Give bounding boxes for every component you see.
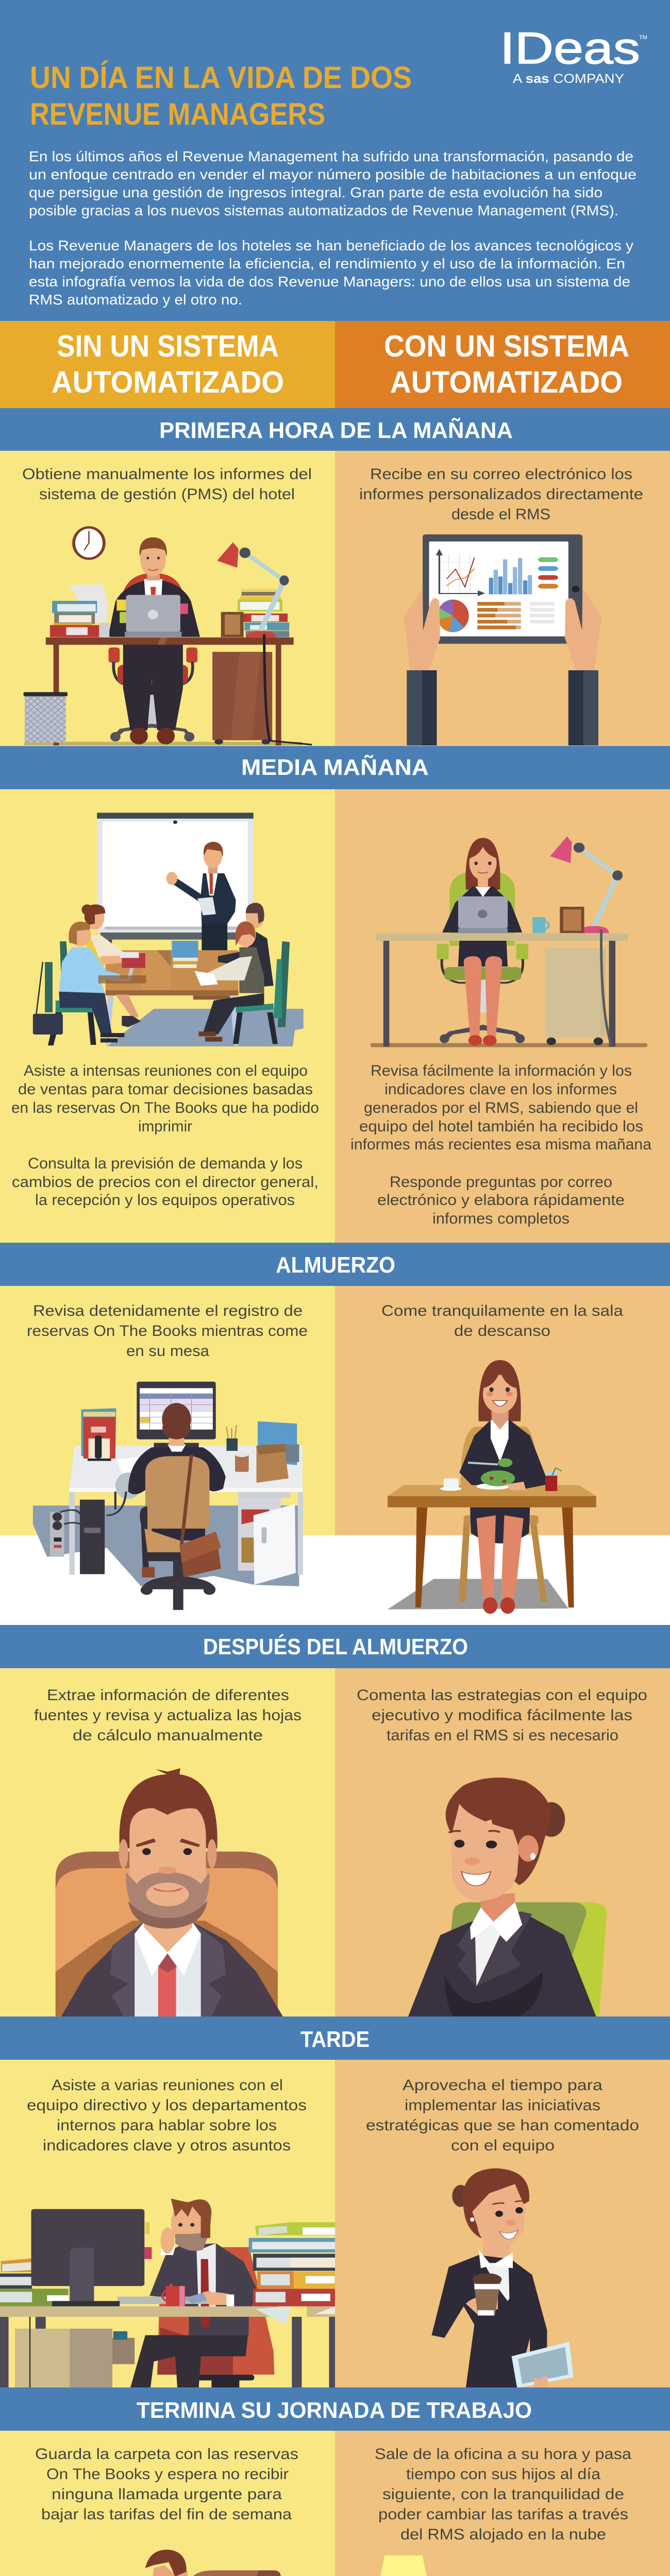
section heading: tarde: TARDE <box>300 2027 370 2052</box>
text: obtiene manualmente: sistema de gestión (PMS) del hotel <box>39 486 295 503</box>
text: revisa fácilmente: Revisa fácilmente la información y los <box>371 1062 632 1079</box>
illustration: woman at tidy desk with laptop <box>371 836 647 1047</box>
column heading: sin un sistema automatizado: AUTOMATIZADO <box>52 365 284 399</box>
intro paragraph 2: RMS automatizado y el otro no. <box>29 292 242 308</box>
illustration: exhausted man in armchair with children <box>44 2550 303 2576</box>
illustration: woman eating salad at table <box>388 1360 596 1614</box>
text: guarda la carpeta: On The Books y espera no recibir <box>46 2466 289 2483</box>
text: sale de la oficina: del RMS alojado en la nube <box>400 2526 606 2543</box>
text: revisa detenidamente: en su mesa <box>126 1343 209 1360</box>
section heading: tarde <box>0 2016 670 2060</box>
intro paragraph 1 <box>29 148 636 218</box>
panel: intro header <box>0 0 670 451</box>
column heading: con un sistema automatizado <box>335 321 670 408</box>
text: asiste a varias reuniones: internos para hablar sobre los <box>57 2117 277 2134</box>
text: guarda la carpeta: ninguna llamada urgente para <box>52 2486 282 2503</box>
text: revisa detenidamente: reservas On The Books mientras come <box>27 1323 308 1340</box>
text: sale de la oficina: tiempo con sus hijos al día <box>406 2466 600 2483</box>
section heading: después del almuerzo <box>0 1625 670 1668</box>
illustration: bearded man portrait <box>56 1768 283 2016</box>
text: asiste a intensas reuniones <box>11 1062 319 1135</box>
text: revisa fácilmente: indicadores clave en los informes <box>384 1081 617 1098</box>
text: revisa fácilmente: equipo del hotel también ha recibido los <box>359 1118 643 1135</box>
text: guarda la carpeta: Guarda la carpeta con las reservas <box>35 2446 298 2463</box>
title <box>30 60 412 131</box>
text: comenta las estrategias: ejecutivo y modifica fácilmente las <box>372 1707 632 1724</box>
text: aprovecha el tiempo: con el equipo <box>451 2137 555 2154</box>
text: responde preguntas: electrónico y elabora rápidamente <box>377 1192 625 1209</box>
intro paragraph 2: han mejorado enormemente la eficiencia, el rendimiento y el uso de la información. En <box>29 256 625 272</box>
text: guarda la carpeta: bajar las tarifas del fin de semana <box>41 2506 292 2523</box>
text: asiste a intensas reuniones: en las reservas On The Books que ha podido <box>11 1099 319 1116</box>
text: sale de la oficina: Sale de la oficina a su hora y pasa <box>375 2446 631 2463</box>
logo: IDeaS, a SAS company: IDeas <box>500 24 640 73</box>
section heading: almuerzo <box>0 1243 670 1286</box>
illustration: man from behind at desk eating <box>33 1382 303 1610</box>
panel: media mañana, sin sistema <box>0 789 335 1243</box>
title: UN DÍA EN LA VIDA DE DOS <box>30 60 412 95</box>
panel: primera hora, sin sistema <box>0 451 335 746</box>
intro paragraph 2 <box>29 238 633 308</box>
text: consulta la previsión: Consulta la previsión de demanda y los <box>28 1155 303 1172</box>
text: aprovecha el tiempo: estratégicas que se han comentado <box>366 2117 639 2134</box>
column heading: sin un sistema automatizado: SIN UN SISTEMA <box>57 329 279 363</box>
panel: tarde, con sistema <box>335 2060 670 2388</box>
section heading: almuerzo: ALMUERZO <box>276 1252 395 1278</box>
section heading: media mañana: MEDIA MAÑANA <box>241 754 429 780</box>
illustration: man at cluttered desk with clock <box>24 526 312 745</box>
panel: media mañana, con sistema <box>335 789 670 1243</box>
text: obtiene manualmente: Obtiene manualmente los informes del <box>22 466 312 483</box>
text: extrae información <box>34 1687 301 1744</box>
illustration: smiling woman portrait <box>408 1777 607 2016</box>
column heading: sin un sistema automatizado <box>0 321 335 408</box>
text: recibe en su correo <box>359 466 643 523</box>
text: aprovecha el tiempo <box>366 2077 639 2154</box>
text: extrae información: Extrae información de diferentes <box>47 1687 289 1704</box>
text: asiste a varias reuniones: indicadores clave y otros asuntos <box>43 2137 291 2154</box>
text: responde preguntas: informes completos <box>432 1210 569 1227</box>
text: asiste a varias reuniones: Asiste a varias reuniones con el <box>52 2077 283 2094</box>
logo: IDeaS, a SAS company: TM <box>639 35 647 41</box>
column heading: con un sistema automatizado: CON UN SISTEMA <box>384 329 629 363</box>
panel: después del almuerzo, sin sistema <box>0 1668 335 2016</box>
text: revisa fácilmente: generados por el RMS, sabiendo que el <box>364 1099 638 1116</box>
section heading: media mañana <box>0 746 670 789</box>
text: consulta la previsión: la recepción y los equipos operativos <box>35 1192 295 1209</box>
text: asiste a intensas reuniones: Asiste a intensas reuniones con el equipo <box>24 1062 308 1079</box>
intro paragraph 2: esta infografía vemos la vida de dos Revenue Managers: uno de ellos usa un sistema de <box>29 274 630 290</box>
text: recibe en su correo: Recibe en su correo electrónico los <box>370 466 632 483</box>
text: responde preguntas <box>377 1174 625 1227</box>
text: sale de la oficina: siguiente, con la tranquilidad de <box>382 2486 624 2503</box>
text: come tranquilamente: Come tranquilamente en la sala <box>381 1302 623 1319</box>
section heading: termina su jornada de trabajo: TERMINA SU JORNADA DE TRABAJO <box>137 2398 532 2423</box>
section heading: después del almuerzo: DESPUÉS DEL ALMUERZO <box>203 1634 468 1659</box>
text: asiste a intensas reuniones: imprimir <box>138 1118 192 1135</box>
text: revisa detenidamente <box>27 1302 308 1360</box>
illustration: woman with coffee and tablet <box>431 2168 574 2388</box>
intro paragraph 1: que persigue una gestión de ingresos integral. Gran parte de esta evolución ha sido <box>29 184 602 200</box>
text: revisa detenidamente: Revisa detenidamente el registro de <box>33 1302 303 1319</box>
text: aprovecha el tiempo: Aprovecha el tiempo para <box>403 2077 602 2094</box>
text: comenta las estrategias <box>357 1687 647 1744</box>
illustration: hands holding tablet with charts <box>404 534 602 745</box>
panel: almuerzo, con sistema <box>335 1286 670 1614</box>
panel: después del almuerzo, con sistema <box>335 1668 670 2016</box>
text: come tranquilamente <box>381 1302 623 1340</box>
text: consulta la previsión <box>12 1155 319 1209</box>
text: consulta la previsión: cambios de precios con el director general, <box>12 1174 319 1191</box>
text: recibe en su correo: desde el RMS <box>451 506 550 523</box>
illustration: woman on sofa with daughters playing <box>353 2555 647 2576</box>
title: REVENUE MANAGERS <box>30 97 325 131</box>
text: asiste a intensas reuniones: de ventas para tomar decisiones basadas <box>18 1081 313 1098</box>
intro paragraph 1: un enfoque centrado en vender el mayor número posible de habitaciones a un enfoque <box>29 166 636 182</box>
section heading: primera hora de la mañana: PRIMERA HORA DE LA MAÑANA <box>159 417 513 443</box>
text: recibe en su correo: informes personalizados directamente <box>359 486 643 503</box>
column heading: con un sistema automatizado: AUTOMATIZADO <box>390 365 623 399</box>
text: revisa fácilmente: informes más recientes esa misma mañana <box>350 1136 651 1153</box>
text: sale de la oficina: poder cambiar las tarifas a través <box>378 2506 628 2523</box>
text: responde preguntas: Responde preguntas por correo <box>390 1174 612 1191</box>
text: sale de la oficina <box>375 2446 631 2543</box>
logo: IDeaS, a SAS company <box>500 24 647 86</box>
panel: almuerzo, sin sistema <box>0 1286 335 1610</box>
panel: primera hora, con sistema <box>335 451 670 746</box>
panel: termina, sin sistema <box>0 2431 335 2576</box>
section heading: termina su jornada de trabajo <box>0 2387 670 2431</box>
text: asiste a varias reuniones: equipo directivo y los departamentos <box>27 2097 307 2114</box>
logo: IDeaS, a SAS company: A sas COMPANY <box>513 72 624 86</box>
text: obtiene manualmente <box>22 466 312 503</box>
text: comenta las estrategias: tarifas en el RMS si es necesario <box>387 1727 618 1744</box>
text: comenta las estrategias: Comenta las estrategias con el equipo <box>357 1687 647 1704</box>
panel: tarde, sin sistema <box>0 2060 336 2388</box>
intro paragraph 2: Los Revenue Managers de los hoteles se han beneficiado de los avances tecnológicos y <box>29 238 633 253</box>
illustration: meeting room with presenter <box>33 812 304 1046</box>
text: extrae información: de cálculo manualmente <box>73 1727 263 1744</box>
text: guarda la carpeta <box>35 2446 298 2523</box>
text: extrae información: fuentes y revisa y actualiza las hojas <box>34 1707 301 1724</box>
intro paragraph 1: En los últimos años el Revenue Management ha sufrido una transformación, pasando de <box>29 148 633 164</box>
text: asiste a varias reuniones <box>27 2077 307 2154</box>
text: aprovecha el tiempo: implementar las iniciativas <box>405 2097 600 2114</box>
intro paragraph 1: posible gracias a los nuevos sistemas automatizados de Revenue Management (RMS). <box>29 202 618 218</box>
text: come tranquilamente: de descanso <box>454 1323 550 1340</box>
text: revisa fácilmente <box>350 1062 651 1153</box>
panel: termina, con sistema <box>335 2431 670 2576</box>
illustration: tired man at computer with binders <box>0 2198 336 2388</box>
